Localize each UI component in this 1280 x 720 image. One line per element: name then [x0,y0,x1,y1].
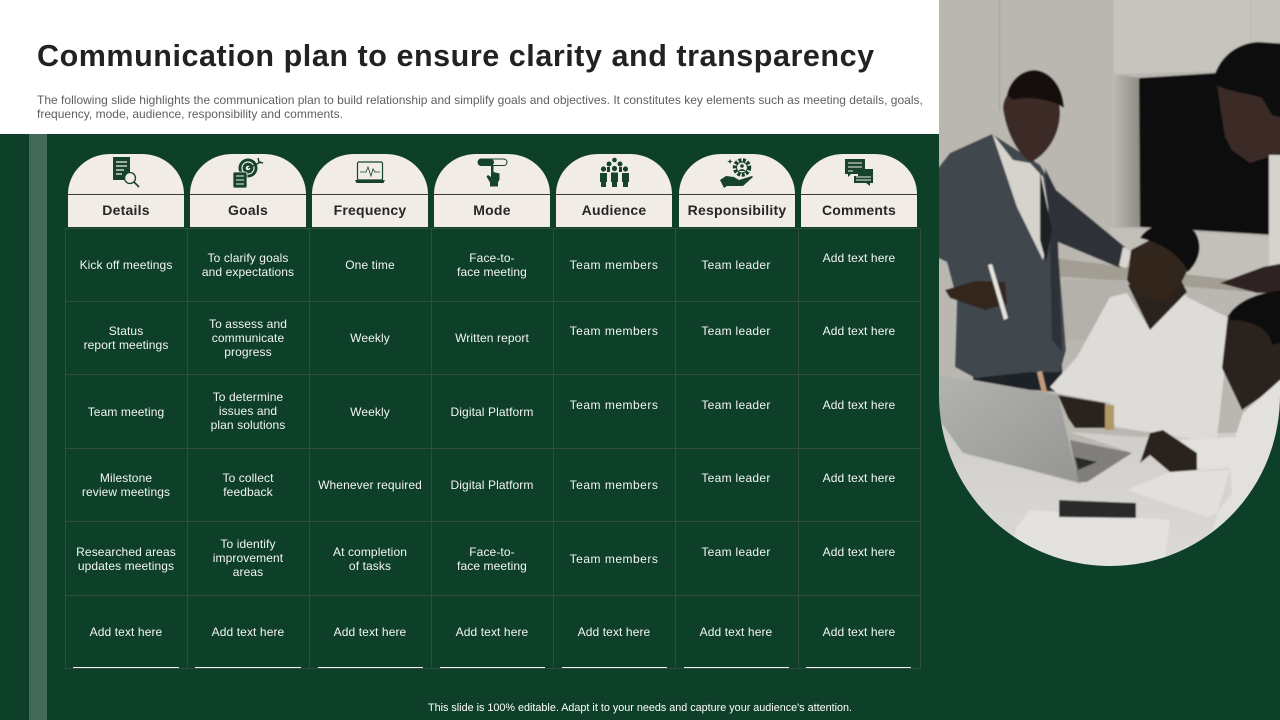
table surface [942,423,1236,557]
table body cells: report meetings [84,338,168,352]
table body cells: Digital Platform [451,405,533,419]
table body cells: Team members [570,552,658,566]
table body cells: Team meeting [88,405,164,419]
table body cells: face meeting [457,265,527,279]
table body cells: Team members [570,324,658,338]
table body cells: communicate [212,331,284,345]
header: Comments [801,154,917,227]
standing man: trousers, jacket, sleeve, shirt, head [973,365,1063,392]
table body cells: Add text here [700,625,772,639]
seated man: shirt, neck, head, arm [1050,283,1230,440]
table body cells: and expectations [202,265,294,279]
table body cells [76,251,895,639]
header: Details: Details [102,202,150,218]
footer note: This slide is 100% editable. Adapt it to your needs and capture your audience's attention. [428,702,852,714]
table body cells: Team leader [701,471,771,485]
standing man at right [1217,85,1280,163]
icon: target and checklist [233,158,264,188]
header: Responsibility: Responsibility [688,202,786,218]
table body cells: Team leader [701,324,771,338]
description [37,93,923,121]
header: Audience: Audience [582,202,646,218]
description: frequency, mode, audience, responsibility and comments. [37,107,343,121]
description: The following slide highlights the communication plan to build relationship and simplify goals and objectives. It constitutes key elements such as meeting details, goals, [37,93,923,107]
table body cells: Add text here [823,625,895,639]
table body cells: issues and [219,404,277,418]
table body cells: updates meetings [78,559,174,573]
table body cells: To identify [220,537,276,551]
table body cells: face meeting [457,559,527,573]
table body cells: One time [345,258,395,272]
photo: team meeting around a laptop [939,0,1280,566]
table body cells: At completion [333,545,407,559]
table body cells: Team leader [701,258,771,272]
table body cells: improvement [213,551,283,565]
icon: hand on toggle [478,158,508,186]
table body cells: Weekly [350,331,390,345]
person in foreground right [1221,313,1280,410]
phone [1059,500,1136,518]
table body cells: Add text here [578,625,650,639]
table body cells: Status [109,324,143,338]
table body cells: Team members [570,258,658,272]
table body cells: To clarify goals [208,251,288,265]
table body cells: feedback [223,485,273,499]
header: Comments: Comments [822,202,896,218]
table body cells: To determine [213,390,283,404]
table body cells: progress [224,345,272,359]
table body cells: of tasks [349,559,391,573]
icon: speech bubbles [845,159,873,186]
table body cells: plan solutions [211,418,285,432]
icon: hand holding gear [720,158,753,188]
header: Goals [190,154,306,227]
table body cells: Face-to- [469,251,515,265]
header: Frequency: Frequency [334,202,406,218]
table body cells: Milestone [100,471,152,485]
table body cells: Add text here [823,545,895,559]
table body cells: areas [233,565,263,579]
table body cells: Add text here [823,398,895,412]
table body cells: Team leader [701,545,771,559]
table body cells: Add text here [90,625,162,639]
table body cells: Weekly [350,405,390,419]
table body cells: Kick off meetings [80,258,172,272]
icon: laptop with pulse [355,161,385,183]
header: Responsibility [679,154,795,227]
header: Goals: Goals [228,202,268,218]
header: Audience [556,154,672,227]
table body cells: review meetings [82,485,170,499]
header: Details [68,154,184,227]
header: Frequency [312,154,428,227]
table body cells: Written report [455,331,529,345]
table body cells: Whenever required [318,478,422,492]
table body cells: Add text here [334,625,406,639]
table body cells: Add text here [823,324,895,338]
title: Communication plan to ensure clarity and transparency [37,39,875,73]
table body cells: Researched areas [76,545,176,559]
icon: document with magnifier [113,157,140,188]
table body cells: Add text here [823,251,895,265]
table body cells: Add text here [823,471,895,485]
table body cells: To assess and [209,317,287,331]
table body cells: To collect [222,471,274,485]
table body cells: Face-to- [469,545,515,559]
accent strip [29,134,47,720]
header panel [0,0,939,134]
table body cells: Add text here [212,625,284,639]
header: Mode [434,154,550,227]
laptop [939,378,1078,482]
table grid lines [65,228,921,669]
icon: group of people [600,158,629,187]
table body cells: Digital Platform [451,478,533,492]
table body cells: Team members [570,398,658,412]
table body cells: Team members [570,478,658,492]
table body cells: Add text here [456,625,528,639]
header: Mode: Mode [473,202,511,218]
table body cells: Team leader [701,398,771,412]
